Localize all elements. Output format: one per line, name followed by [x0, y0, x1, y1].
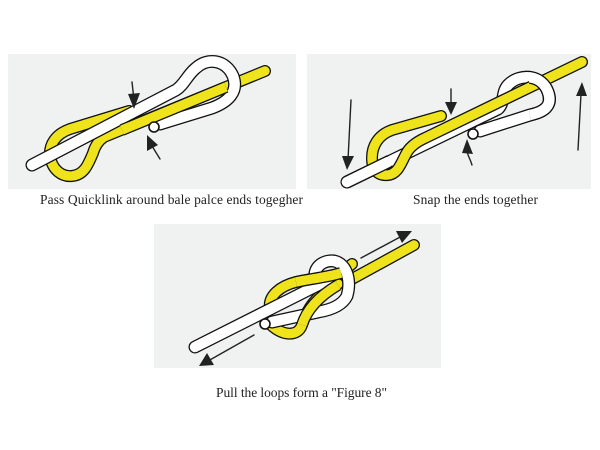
yellow cord, step 2 [347, 62, 582, 182]
caption: step 2: Snap the ends together [413, 192, 538, 207]
yellow cord, step 1 [50, 71, 265, 176]
arrow: top pointer, step 1 [128, 82, 140, 109]
panel: step 3 illustration [154, 224, 441, 368]
white cord, step 3 [195, 261, 349, 347]
yellow crossing strand, step 3 [296, 273, 341, 325]
caption: step 3: Pull the loops form a "Figure 8" [216, 385, 387, 400]
panel: step 1 illustration [8, 54, 296, 189]
arrow: bottom pointer, step 2 [462, 139, 473, 165]
arrow: left down arrow, step 2 [342, 100, 354, 170]
caption: step 1: Pass Quicklink around bale palce ends togegher [40, 192, 304, 207]
arrow: top pointer, step 2 [445, 89, 457, 115]
panel: step 2 illustration [307, 54, 591, 189]
arrow: lower left pull, step 3 [199, 335, 254, 366]
arrow: right up arrow, step 2 [576, 82, 587, 150]
arrow: upper right pull, step 3 [361, 231, 412, 258]
white cord, step 2 [347, 77, 549, 182]
arrow: bottom pointer, step 1 [147, 135, 160, 159]
white cord, step 1 [32, 61, 235, 165]
yellow cord, step 3 [268, 245, 414, 334]
